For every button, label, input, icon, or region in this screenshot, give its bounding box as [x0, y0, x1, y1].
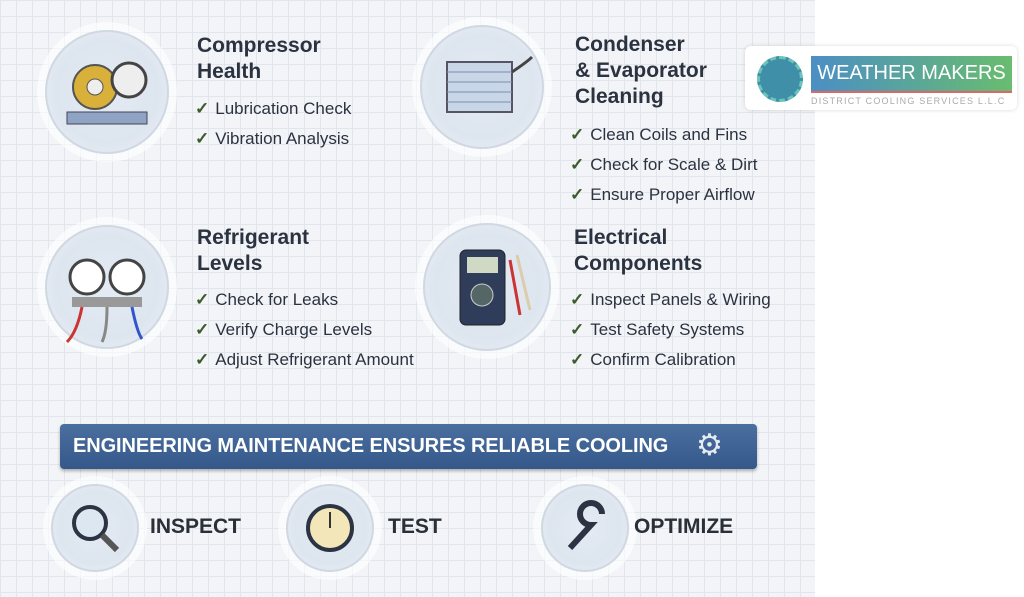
logo subtitle: DISTRICT COOLING SERVICES L.L.C: [811, 96, 1005, 106]
step: optimize: [533, 476, 733, 580]
panel: refrigerant: [37, 218, 414, 369]
heading: [575, 33, 707, 108]
icon: multimeter: [423, 223, 551, 351]
heading: Refrigerant: [197, 226, 309, 249]
panel: electrical: [415, 216, 771, 369]
heading: Electrical: [574, 226, 667, 249]
checklist: ✓ Vibration Analysis: [195, 129, 349, 148]
checklist: ✓ Inspect Panels & Wiring: [570, 290, 771, 309]
checklist: ✓ Ensure Proper Airflow: [570, 185, 755, 204]
label: OPTIMIZE: [634, 515, 733, 538]
icon: coil: [420, 25, 544, 149]
checklist: ✓ Check for Leaks: [195, 290, 338, 309]
heading: Condenser: [575, 33, 685, 56]
icon: magnifier: [51, 484, 139, 572]
heading: [574, 226, 702, 275]
icon: compressor gears: [45, 30, 169, 154]
checklist: [195, 290, 414, 369]
heading: Levels: [197, 252, 262, 275]
icon: gear: ⚙: [696, 429, 723, 462]
step: inspect: [43, 476, 241, 580]
icon: gauges: [45, 225, 169, 349]
logo: [745, 46, 1017, 110]
logo bar: WEATHER MAKERS: [817, 62, 1006, 84]
heading: Compressor: [197, 34, 321, 57]
icon: logo gear: [757, 56, 803, 102]
checklist: [195, 99, 352, 148]
heading: Cleaning: [575, 85, 664, 108]
heading: [197, 226, 309, 275]
heading: & Evaporator: [575, 59, 707, 82]
panel: compressor health: [37, 22, 352, 162]
checklist: ✓ Clean Coils and Fins: [570, 125, 747, 144]
label: TEST: [388, 515, 442, 538]
banner text: ENGINEERING MAINTENANCE ENSURES RELIABLE COOLING: [73, 435, 668, 457]
icon: wrench: [541, 484, 629, 572]
heading: [197, 34, 321, 83]
heading: Health: [197, 60, 261, 83]
heading: Components: [574, 252, 702, 275]
checklist: [570, 125, 758, 204]
checklist: [570, 290, 771, 369]
checklist: ✓ Confirm Calibration: [570, 350, 736, 369]
banner: [60, 424, 757, 469]
label: INSPECT: [150, 515, 241, 538]
checklist: ✓ Check for Scale & Dirt: [570, 155, 757, 174]
checklist: ✓ Adjust Refrigerant Amount: [195, 350, 414, 369]
checklist: ✓ Lubrication Check: [195, 99, 351, 118]
step: test: [278, 476, 442, 580]
checklist: ✓ Verify Charge Levels: [195, 320, 372, 339]
checklist: ✓ Test Safety Systems: [570, 320, 744, 339]
panel: condenser: [412, 17, 758, 204]
icon: gauge: [286, 484, 374, 572]
logo bar: [811, 56, 1012, 93]
